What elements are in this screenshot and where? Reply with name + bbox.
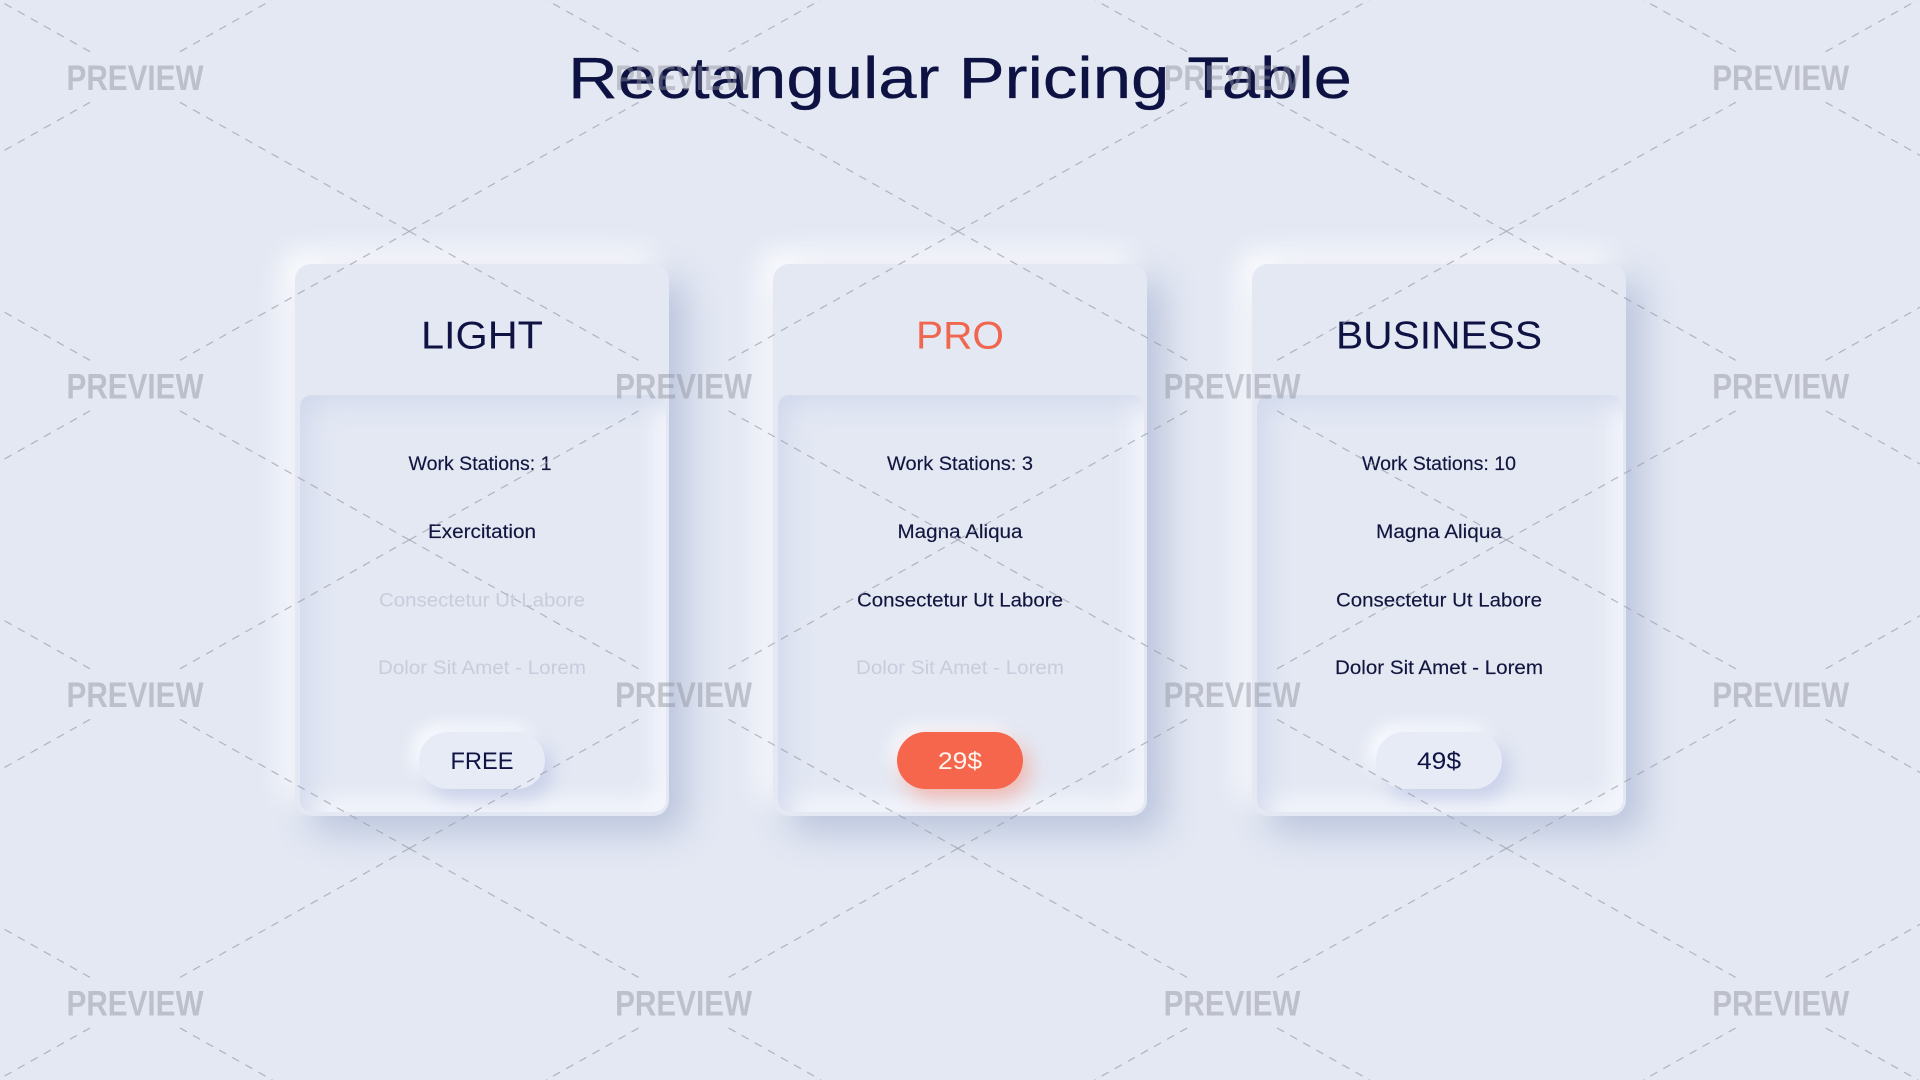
features well	[1257, 395, 1623, 812]
watermark overlay: PREVIEW	[1164, 368, 1301, 407]
watermark overlay: PREVIEW	[615, 59, 752, 98]
watermark overlay: PREVIEW	[66, 985, 204, 1024]
feature: Magna Aliqua	[1376, 522, 1502, 543]
heading: BUSINESS	[1336, 314, 1542, 358]
watermark overlay: PREVIEW	[1164, 676, 1301, 715]
feature: Work Stations: 3	[887, 454, 1033, 475]
heading: PRO	[916, 314, 1004, 358]
features well	[300, 395, 666, 812]
price label: 29$	[938, 748, 982, 775]
feature: Magna Aliqua	[898, 522, 1023, 543]
panel: LIGHT plan	[294, 264, 668, 816]
watermark overlay: PREVIEW	[66, 59, 204, 98]
watermark overlay: PREVIEW	[1164, 985, 1301, 1024]
watermark overlay: PREVIEW	[66, 676, 204, 715]
title: Rectangular Pricing Table	[568, 46, 1352, 111]
watermark overlay: PREVIEW	[1712, 676, 1849, 715]
price label: 49$	[1417, 748, 1461, 775]
watermark overlay: PREVIEW	[1712, 368, 1849, 407]
BUSINESS plan text	[1335, 314, 1543, 775]
LIGHT plan text	[378, 314, 586, 775]
PRO plan text	[856, 314, 1064, 775]
price button: FREE	[418, 732, 544, 789]
feature: Work Stations: 10	[1362, 454, 1516, 475]
watermark overlay: PREVIEW	[615, 368, 752, 407]
watermark overlay: PREVIEW	[66, 368, 204, 407]
feature, unavailable: Dolor Sit Amet - Lorem	[378, 658, 586, 679]
price button: 29$	[897, 732, 1023, 789]
feature: Consectetur Ut Labore	[1336, 590, 1542, 612]
feature, unavailable: Dolor Sit Amet - Lorem	[856, 658, 1064, 679]
watermark overlay: PREVIEW	[1712, 59, 1849, 98]
feature, unavailable: Consectetur Ut Labore	[378, 590, 584, 612]
watermark overlay: PREVIEW	[615, 676, 752, 715]
price label: FREE	[450, 748, 513, 775]
feature: Consectetur Ut Labore	[857, 590, 1063, 612]
heading: LIGHT	[420, 314, 542, 358]
watermark overlay: PREVIEW	[1164, 59, 1301, 98]
panel: BUSINESS plan	[1252, 264, 1626, 816]
watermark overlay: PREVIEW	[615, 985, 752, 1024]
panel: PRO plan	[773, 264, 1147, 816]
price button: 49$	[1376, 732, 1502, 789]
feature: Dolor Sit Amet - Lorem	[1335, 658, 1543, 679]
feature: Work Stations: 1	[408, 454, 551, 475]
watermark overlay: PREVIEW	[1712, 985, 1849, 1024]
feature: Exercitation	[428, 522, 536, 543]
features well	[778, 395, 1144, 812]
